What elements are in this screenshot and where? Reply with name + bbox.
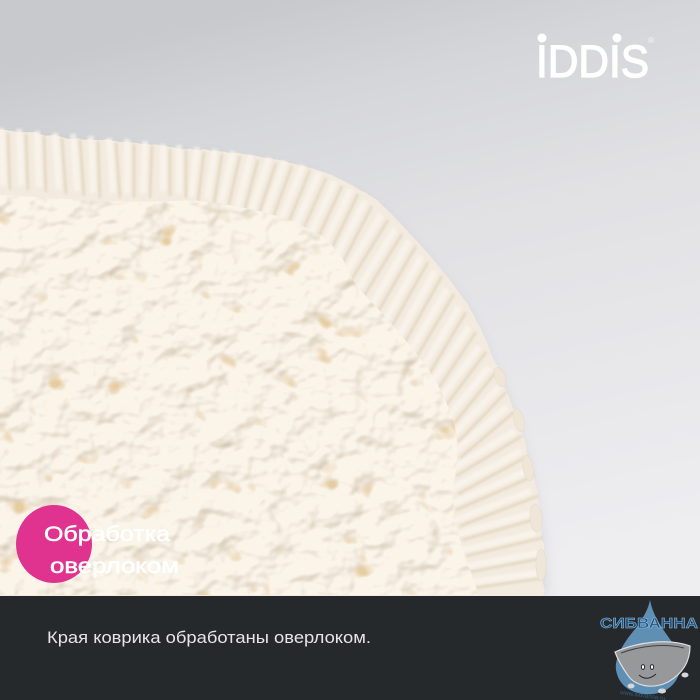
badge: pink circle xyxy=(16,505,92,583)
bath feet xyxy=(628,672,688,694)
logo: iddis: ® xyxy=(648,36,654,45)
overlock rope highlights xyxy=(1,128,537,583)
bath eyes and smile xyxy=(639,665,656,678)
water drop xyxy=(616,600,680,694)
badge heading: оверлоком xyxy=(50,555,179,578)
overlock edge beads xyxy=(492,366,546,581)
logo: iddis: IDDIS xyxy=(536,36,649,87)
badge heading: Обработка xyxy=(44,523,170,546)
smiling bath xyxy=(615,642,690,686)
sherpa pile xyxy=(0,195,478,595)
rug xyxy=(0,128,548,620)
overlock edge xyxy=(0,130,544,600)
caption bar xyxy=(0,596,700,700)
badge heading xyxy=(44,523,179,578)
brand name: СИБВАННА xyxy=(600,615,698,632)
overlock stitches xyxy=(8,133,544,588)
rug shadow xyxy=(0,134,548,595)
watermark: Sibvanna logo xyxy=(600,600,698,700)
caption text: Края коврика обработаны оверлоком. xyxy=(47,629,371,647)
bath rim xyxy=(621,646,684,653)
